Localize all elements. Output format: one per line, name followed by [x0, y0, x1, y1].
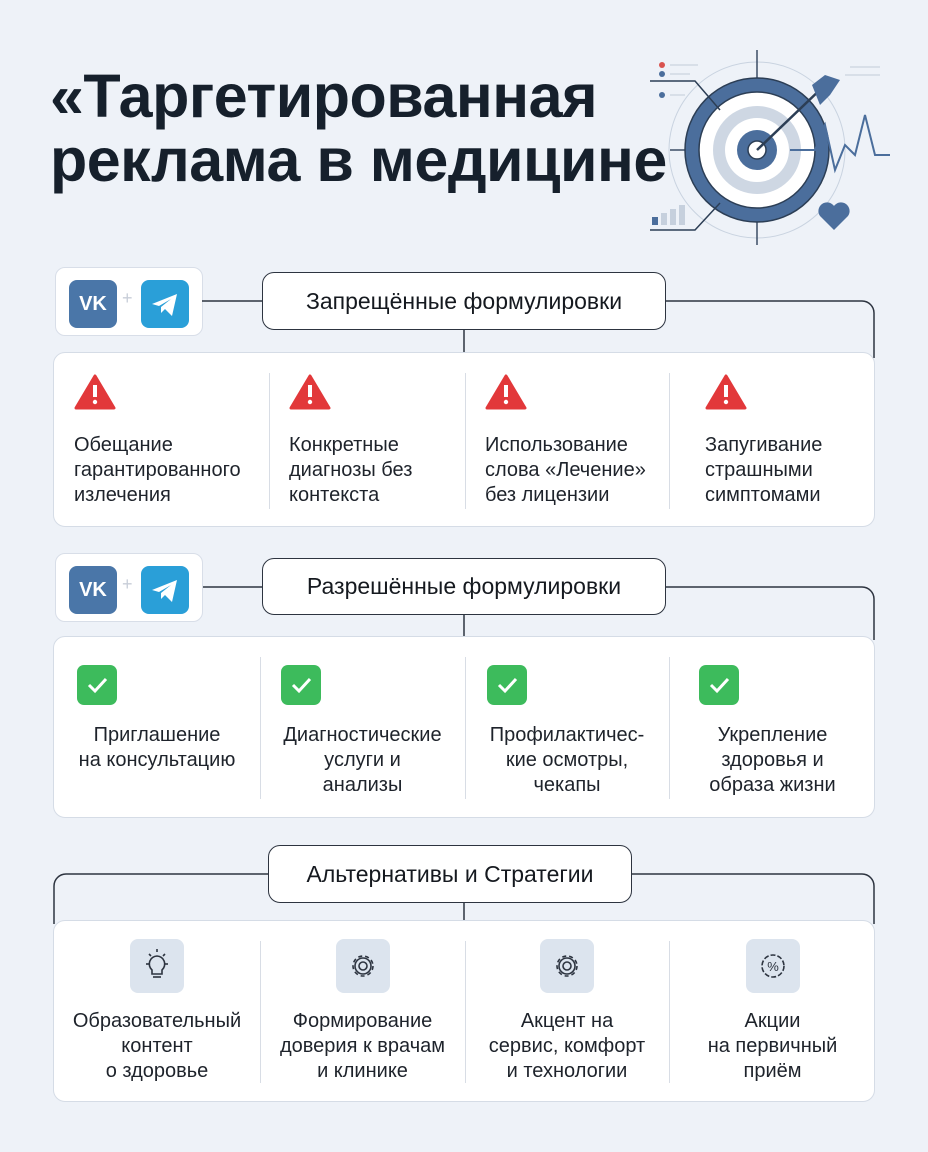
item 1: lightbulb: Образовательный: [73, 1010, 241, 1032]
item 1: lightbulb: [73, 939, 241, 1082]
icon: check 2: [281, 665, 321, 705]
item 1: Обещание гарантированного излечения: [74, 434, 241, 506]
icon: check 4: [699, 665, 739, 705]
item 3: [490, 724, 644, 796]
item 4: Укрепление: [718, 724, 827, 746]
item 4: discount badge: приём: [744, 1060, 802, 1082]
icon: target illustration: [650, 50, 890, 245]
item 2: gear: [280, 939, 445, 1082]
panel: allowed: [53, 636, 875, 818]
item 1: lightbulb: контент: [121, 1035, 193, 1057]
item 3: gear: Акцент на: [521, 1010, 613, 1032]
badge: vk + telegram (section 2): [55, 553, 203, 622]
item 4: Запугивание: [705, 434, 822, 456]
badge: vk + telegram (section 2): +: [122, 574, 133, 594]
item 3: gear: сервис, комфорт: [489, 1035, 645, 1057]
item 4: discount badge: %: [767, 959, 779, 974]
item 4: discount badge: Акции: [745, 1010, 800, 1032]
item 4: discount badge: на первичный: [708, 1035, 837, 1057]
item 3: чекапы: [533, 774, 601, 796]
item 1: [79, 724, 235, 771]
item 1: Приглашение: [94, 724, 220, 746]
badge: vk + telegram (section 2): VK: [79, 579, 107, 601]
heading: alternatives: Альтернативы и Стратегии: [307, 861, 593, 887]
heading: forbidden: Запрещённые формулировки: [306, 288, 622, 314]
item 4: [705, 374, 822, 506]
item 3: без лицензии: [485, 484, 609, 506]
heading: allowed: Разрешённые формулировки: [307, 573, 621, 599]
badge: vk + telegram (section 1): VK: [79, 293, 107, 315]
title: [50, 62, 667, 194]
item 2: контекста: [289, 484, 379, 506]
item 3: слова «Лечение»: [485, 459, 646, 481]
item 2: gear: и клинике: [317, 1060, 408, 1082]
item 1: на консультацию: [79, 749, 235, 771]
badge: vk + telegram (section 1): +: [122, 288, 133, 308]
icon: check 3: [487, 665, 527, 705]
title: «Таргетированная: [50, 62, 597, 130]
item 2: анализы: [323, 774, 402, 796]
item 3: gear: и технологии: [507, 1060, 627, 1082]
panel: forbidden: [53, 352, 875, 527]
item 4: образа жизни: [709, 774, 836, 796]
item 3: Профилактичес-: [490, 724, 644, 746]
icon: check 1: [77, 665, 117, 705]
item 4: здоровья и: [721, 749, 824, 771]
item 1: lightbulb: о здоровье: [106, 1060, 208, 1082]
item 2: услуги и: [324, 749, 401, 771]
item 4: discount badge: [708, 939, 837, 1082]
heading: forbidden: [262, 272, 666, 330]
item 4: [709, 724, 836, 796]
item 3: gear: [489, 939, 645, 1082]
item 4: симптомами: [705, 484, 821, 506]
item 2: диагнозы без: [289, 459, 412, 481]
title: реклама в медицине: [50, 126, 667, 194]
item 2: Диагностические: [283, 724, 442, 746]
item 2: gear: доверия к врачам: [280, 1035, 445, 1057]
item 2: Конкретные: [289, 434, 399, 456]
heading: allowed: [262, 558, 666, 615]
item 2: [289, 374, 412, 506]
item 3: кие осмотры,: [506, 749, 628, 771]
item 3: Использование: [485, 434, 628, 456]
item 3: [485, 374, 646, 506]
item 2: gear: Формирование: [293, 1010, 432, 1032]
item 1: [74, 374, 241, 506]
item 2: [283, 724, 442, 796]
panel: alternatives: [53, 920, 875, 1102]
badge: vk + telegram (section 1): [55, 267, 203, 336]
item 4: страшными: [705, 459, 813, 481]
heading: alternatives: [268, 845, 632, 903]
